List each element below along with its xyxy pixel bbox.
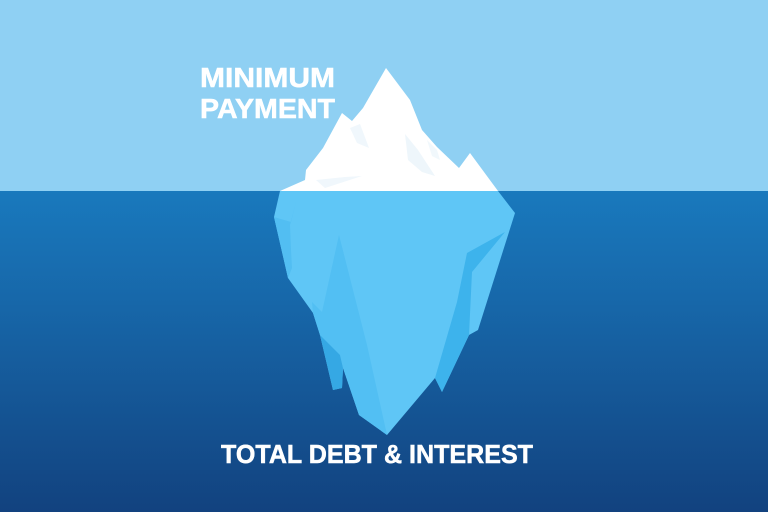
shaded facet: lower left shard xyxy=(320,335,343,390)
iceberg tip above water xyxy=(280,68,498,191)
shaded facet: centre left xyxy=(312,235,387,435)
shaded facet: right xyxy=(435,232,505,392)
background: ocean xyxy=(0,191,768,512)
heading: minimum payment: MINIMUM xyxy=(200,62,335,93)
heading: minimum payment: PAYMENT xyxy=(200,93,335,124)
iceberg body under water xyxy=(274,191,515,435)
shaded facet: upper left edge xyxy=(274,202,296,278)
label: total debt and interest: TOTAL DEBT & INTEREST xyxy=(221,439,533,469)
heading: minimum payment xyxy=(200,62,335,124)
background: sky xyxy=(0,0,768,191)
iceberg xyxy=(274,68,515,435)
